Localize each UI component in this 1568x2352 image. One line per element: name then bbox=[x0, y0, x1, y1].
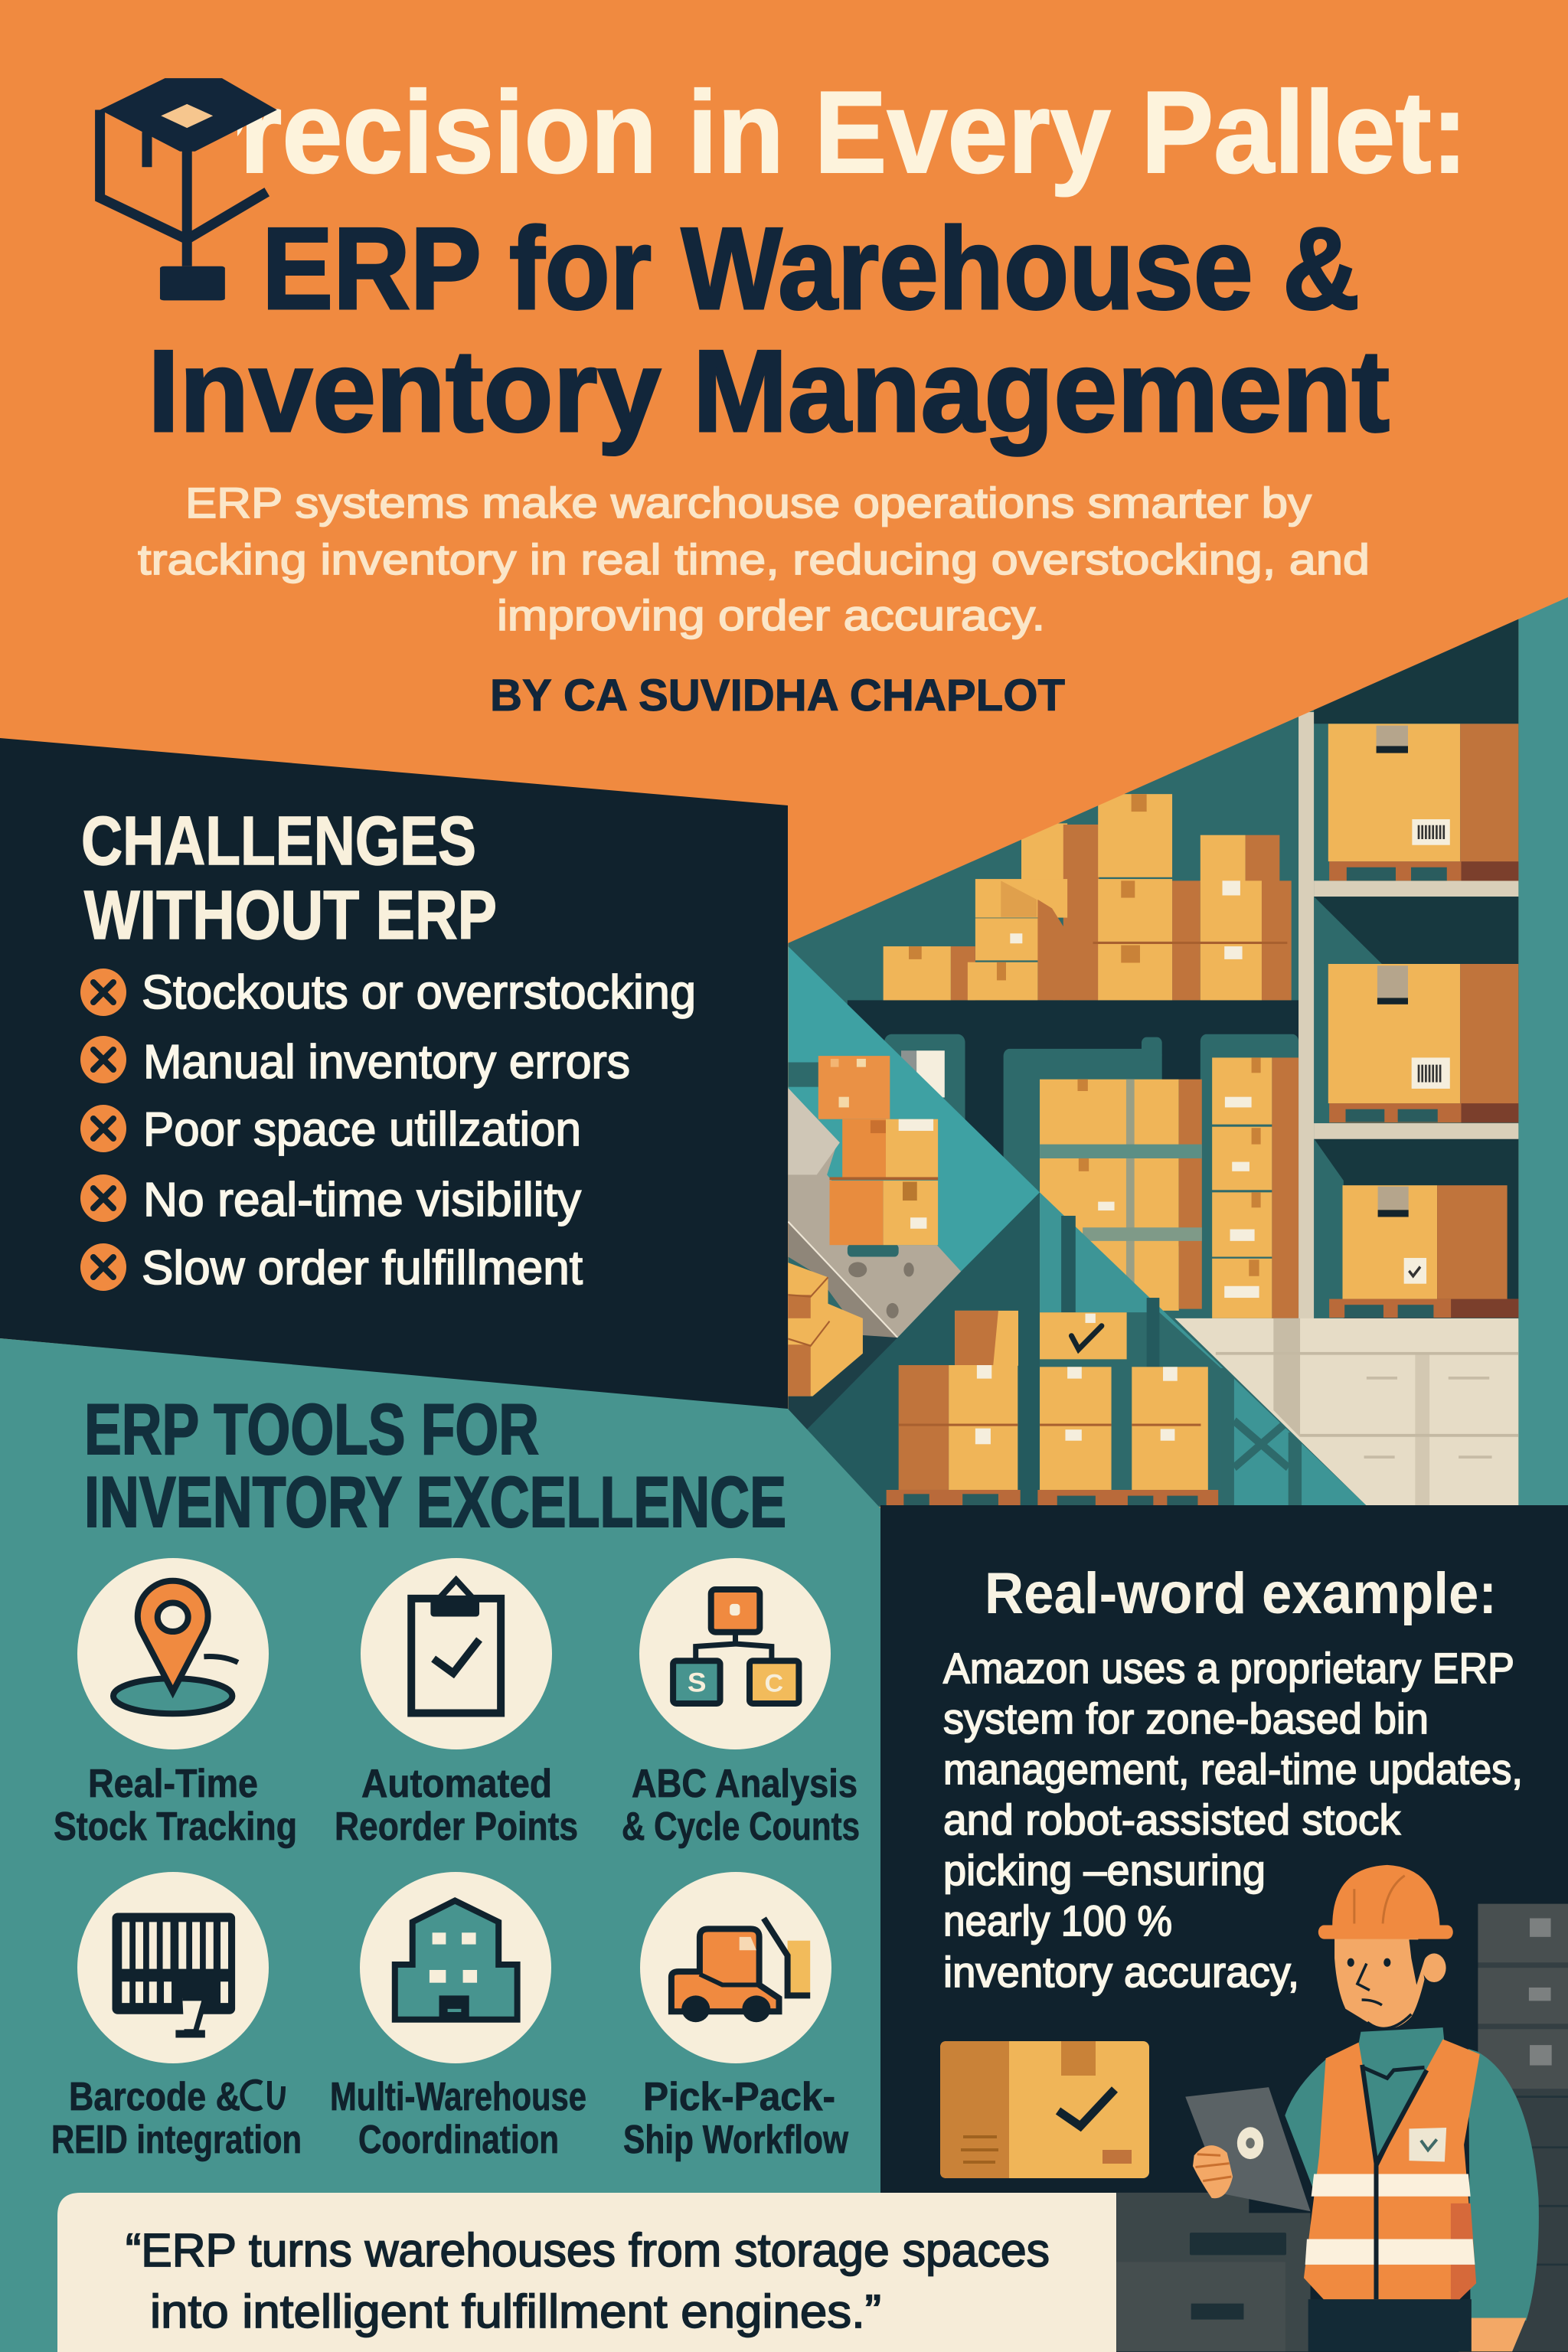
tablet and hand bbox=[1185, 2087, 1311, 2211]
right column box stack bbox=[1212, 1057, 1298, 1318]
orange header background bbox=[0, 0, 1568, 943]
tool: ABC analysis: S bbox=[688, 1668, 707, 1697]
example heading: Real-word example: bbox=[985, 1561, 1497, 1626]
bottom box stacks on pallets bbox=[887, 1311, 1218, 1506]
tool: pick-pack-ship workflow bbox=[623, 1872, 848, 2162]
tool: automated reorder points: Reorder Points bbox=[335, 1805, 578, 1849]
tool: barcode and RFID bbox=[51, 1872, 302, 2162]
example body text: picking –ensuring bbox=[943, 1846, 1266, 1894]
tool: real-time stock tracking: Real-Time bbox=[88, 1762, 258, 1806]
tool: automated reorder points: Automated bbox=[361, 1762, 552, 1806]
title line 1: recision in Every Pallet: bbox=[240, 67, 1468, 198]
title line 2: ERP for Warehouse & bbox=[262, 204, 1360, 334]
panel: real-world example bbox=[57, 1505, 1568, 2352]
tool: ABC analysis: C bbox=[765, 1671, 783, 1697]
shrink-wrapped pallet bbox=[1040, 1080, 1202, 1311]
teal uprights and cross brace bbox=[1040, 1192, 1367, 1506]
panel: challenges without ERP bbox=[0, 738, 788, 1410]
title bbox=[148, 67, 1468, 456]
stone floor bbox=[788, 1063, 961, 1338]
tool: barcode and RFID: Barcode & bbox=[69, 2075, 240, 2119]
left orange box stack bbox=[818, 1056, 938, 1245]
top shelf box stack bbox=[884, 794, 1292, 1000]
tools heading bbox=[84, 1389, 786, 1542]
worker body bbox=[1285, 2027, 1539, 2351]
item: stockouts: Stockouts or overrstocking bbox=[142, 966, 696, 1019]
example body text bbox=[943, 1644, 1523, 1996]
quote panel: into intelligent fulfillment engines.” bbox=[150, 2285, 881, 2337]
tool: real-time stock tracking: Stock Tracking bbox=[54, 1805, 297, 1849]
worker illustration with shelves and tablet bbox=[1116, 1865, 1568, 2351]
tools heading: INVENTORY EXCELLENCE bbox=[84, 1462, 786, 1542]
tool: automated reorder points bbox=[335, 1558, 578, 1849]
tool: ABC analysis bbox=[622, 1558, 860, 1849]
quote panel: “ERP turns warehouses from storage spaces bbox=[126, 2224, 1050, 2276]
item: slow fulfillment: Slow order fulfillment bbox=[142, 1242, 583, 1295]
item: manual errors: Manual inventory errors bbox=[143, 1036, 630, 1089]
title line 1: P bbox=[170, 67, 247, 198]
item: space utilization: Poor space utillzation bbox=[143, 1103, 581, 1156]
icon: shelf rack bbox=[1298, 712, 1518, 1321]
background drawers bbox=[1478, 1904, 1568, 2351]
icon: shelf box with check, bottom bbox=[1329, 1185, 1518, 1318]
challenge list bbox=[80, 966, 696, 1295]
floor box pile bbox=[788, 1263, 863, 1396]
warehouse illustration bbox=[788, 589, 1568, 1507]
tool: barcode and RFID: REID integration bbox=[51, 2118, 302, 2162]
title line 3: Inventory Management bbox=[148, 326, 1390, 456]
cream floor panels bbox=[1174, 1318, 1518, 1506]
tool: real-time stock tracking bbox=[54, 1558, 297, 1849]
tool: multi-warehouse coordination bbox=[330, 1872, 586, 2162]
icon: shelf box with barcode, top bbox=[1328, 724, 1518, 880]
foreground cabinet bbox=[1116, 2193, 1311, 2351]
tool: multi-warehouse coordination: Coordination bbox=[358, 2118, 559, 2162]
light teal triangle bbox=[788, 946, 1040, 1338]
item: visibility: No real-time visibility bbox=[143, 1174, 581, 1227]
example body text: system for zone-based bin bbox=[943, 1694, 1429, 1743]
icon: shelf box with barcode, middle bbox=[1328, 964, 1518, 1122]
lower-left dark teal wedge bbox=[795, 1192, 1040, 1506]
example body text: inventory accuracy, bbox=[943, 1948, 1299, 1996]
byline: BY CA SUVIDHA CHAPLOT bbox=[490, 671, 1065, 720]
tool: pick-pack-ship workflow: Ship Workflow bbox=[623, 2118, 848, 2162]
subtitle: improving order accuracy. bbox=[497, 591, 1045, 639]
tool: multi-warehouse coordination: Multi-Warehouse bbox=[330, 2075, 586, 2119]
worker head and hard hat bbox=[1318, 1865, 1453, 2029]
example body text: nearly 100 % bbox=[943, 1896, 1172, 1945]
subtitle: tracking inventory in real time, reducing overstocking, and bbox=[138, 535, 1370, 583]
quote panel bbox=[57, 2193, 1116, 2352]
example body text: management, real-time updates, bbox=[943, 1745, 1523, 1793]
challenges heading: CHALLENGES bbox=[81, 803, 476, 880]
icon: checked box on stack bbox=[1040, 1312, 1127, 1359]
icon: checked parcel bbox=[940, 2041, 1149, 2178]
example body text: Amazon uses a proprietary ERP bbox=[943, 1644, 1514, 1692]
challenges heading bbox=[81, 803, 497, 954]
example body text: and robot-assisted stock bbox=[943, 1795, 1401, 1844]
tool: pick-pack-ship workflow: Pick-Pack- bbox=[643, 2075, 835, 2119]
subtitle: ERP systems make warchouse operations smarter by bbox=[185, 479, 1312, 527]
challenges heading: WITHOUT ERP bbox=[84, 877, 497, 954]
subtitle bbox=[138, 479, 1370, 639]
tool: ABC analysis: & Cycle Counts bbox=[622, 1805, 860, 1849]
panel: ERP tools bbox=[0, 1338, 880, 2352]
tool: ABC analysis: ABC Analysis bbox=[632, 1762, 858, 1806]
icon: box on stand with diamond cap bbox=[100, 69, 277, 300]
tools heading: ERP TOOLS FOR bbox=[84, 1389, 539, 1469]
